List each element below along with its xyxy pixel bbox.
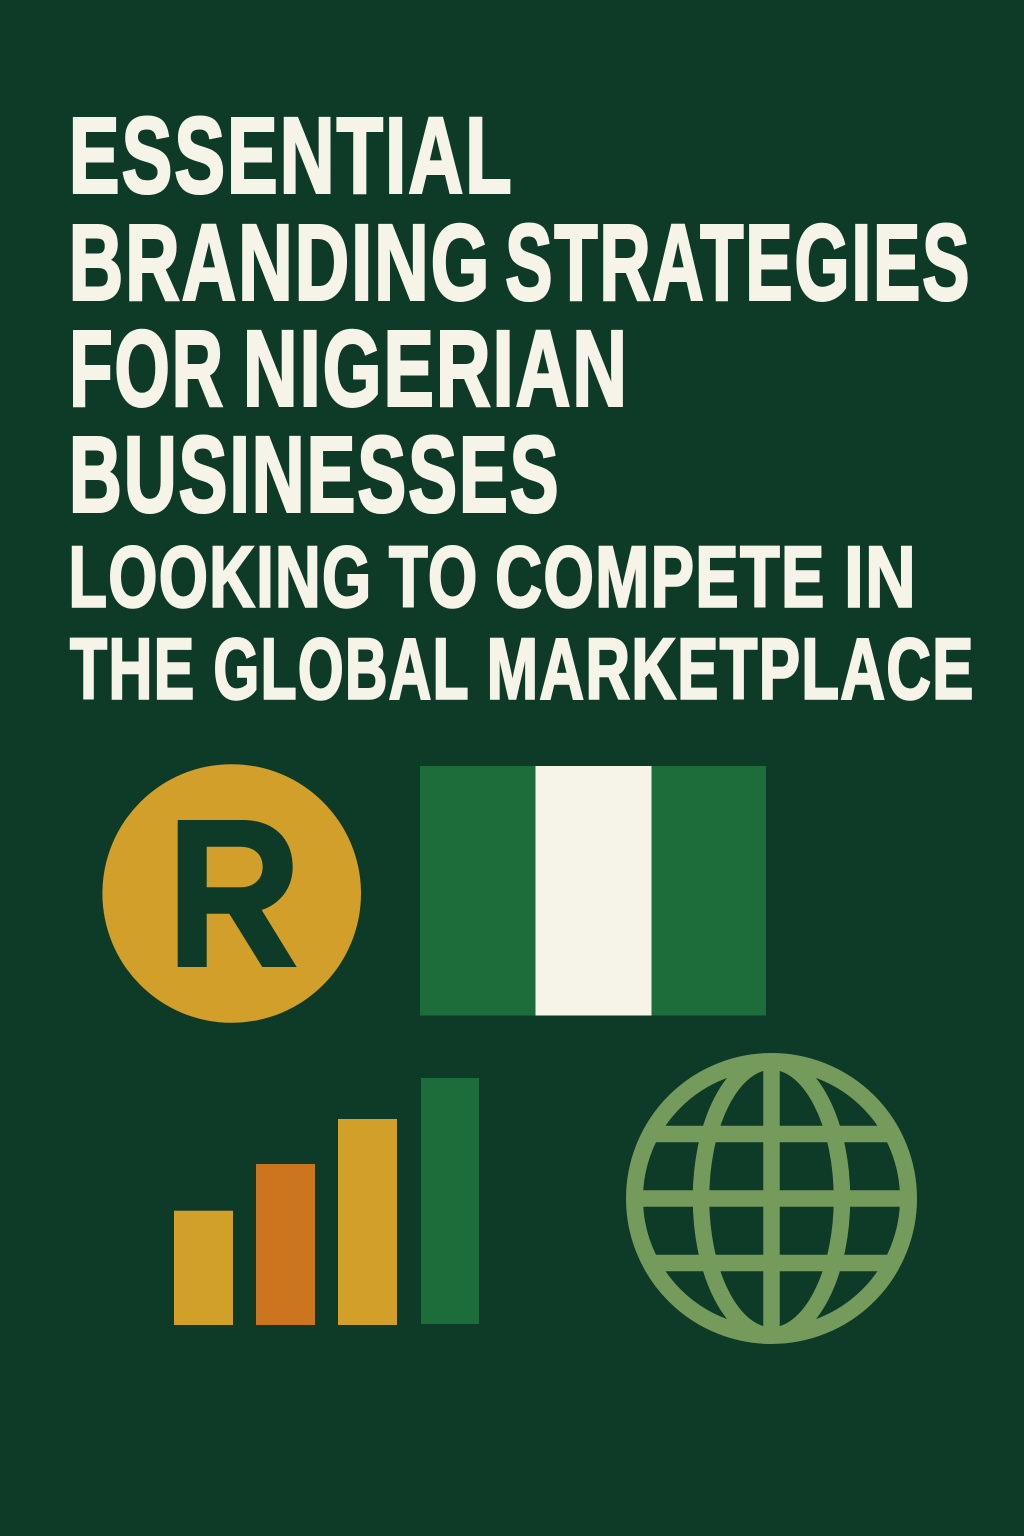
title: ESSENTIAL	[69, 94, 514, 216]
title: BUSINESSES	[69, 414, 561, 534]
subtitle: IN	[844, 530, 917, 626]
subtitle	[68, 530, 975, 718]
subtitle: THE	[70, 622, 196, 718]
subtitle: TO	[389, 530, 479, 626]
icon: globe	[634, 1061, 909, 1336]
icon: registered trademark	[102, 764, 361, 1023]
bar chart	[174, 1078, 479, 1325]
icon: Nigerian flag	[420, 766, 766, 1016]
title	[69, 94, 971, 534]
title: FOR	[69, 308, 225, 429]
subtitle: LOOKING	[68, 530, 372, 626]
subtitle: COMPETE	[495, 530, 826, 626]
title: BRANDING	[69, 201, 491, 322]
subtitle: GLOBAL	[214, 622, 470, 718]
title: NIGERIAN	[243, 308, 629, 429]
